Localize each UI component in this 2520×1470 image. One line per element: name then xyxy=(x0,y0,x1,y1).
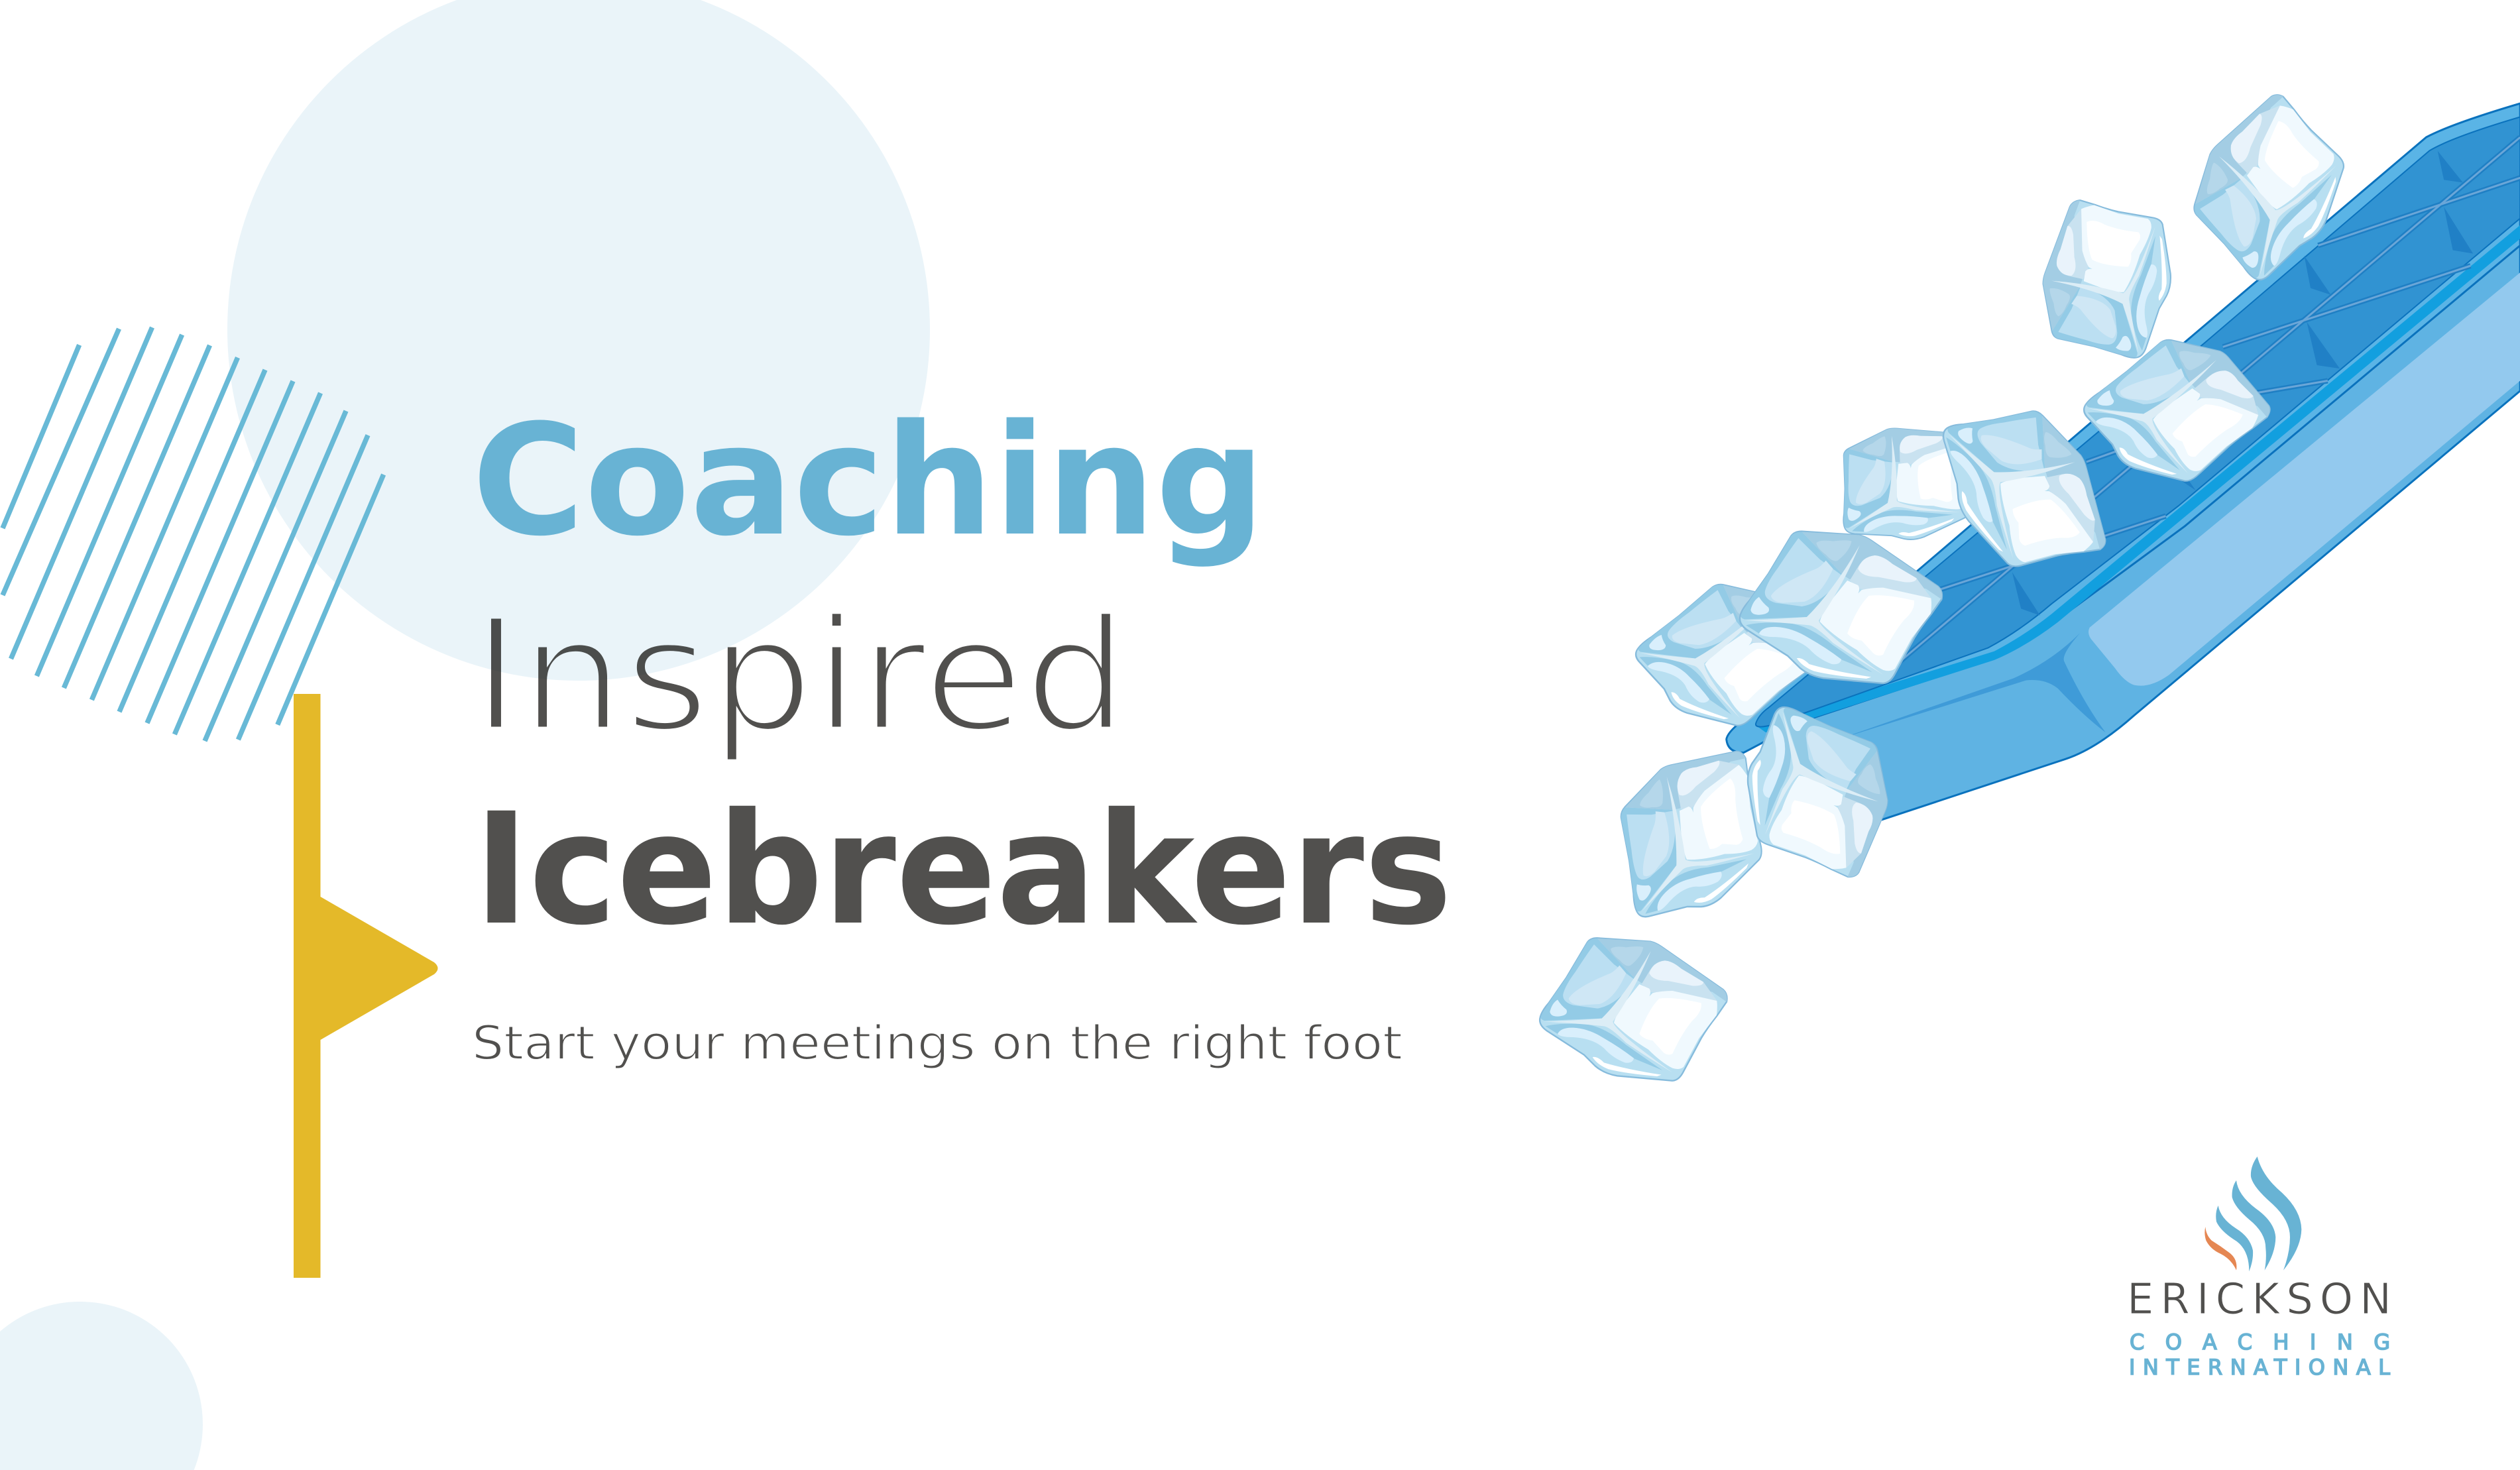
logo flames xyxy=(2205,1157,2301,1271)
title: Inspired: Inspired xyxy=(472,585,1128,767)
tray body xyxy=(1798,235,2520,820)
ice cube 7 xyxy=(1740,532,1942,683)
tray corner fold xyxy=(1839,633,2106,739)
ice cube 8 xyxy=(1588,709,1794,960)
logo line: coaching: COACHING xyxy=(2130,1329,2390,1355)
large pale circle xyxy=(227,0,930,681)
logo line: international: INTERNATIONAL xyxy=(2129,1355,2390,1380)
ice tray xyxy=(1727,103,2520,820)
logo wordmark: ERICKSON xyxy=(2127,1275,2391,1324)
title: Coaching: Coaching xyxy=(472,392,1265,570)
ice cubes xyxy=(1540,80,2356,1081)
ice cube 4 xyxy=(1809,396,2002,572)
striped circle pattern xyxy=(3,327,384,741)
ice cube 2 xyxy=(2023,177,2192,381)
tray cell shadows xyxy=(2012,151,2473,616)
tray interior xyxy=(1756,117,2520,727)
tray side panel xyxy=(2089,272,2520,686)
subtitle: Start your meetings on the right foot xyxy=(472,1016,1403,1070)
title: Icebreakers: Icebreakers xyxy=(474,780,1452,959)
tray rim band xyxy=(1756,225,2520,732)
small pale circle xyxy=(0,1302,203,1470)
ice cube 1 xyxy=(2181,80,2356,294)
tray rim xyxy=(1727,103,2520,753)
ice cube 9 xyxy=(1724,698,1910,886)
tray cell dividers xyxy=(1880,137,2520,678)
ice cube 3 xyxy=(2061,331,2293,489)
ice cube 10 xyxy=(1540,938,1727,1081)
logo xyxy=(2127,1157,2391,1380)
ice cube 5 xyxy=(1907,374,2142,602)
ice cube 6 xyxy=(1613,576,1845,734)
yellow flag xyxy=(294,694,437,1278)
